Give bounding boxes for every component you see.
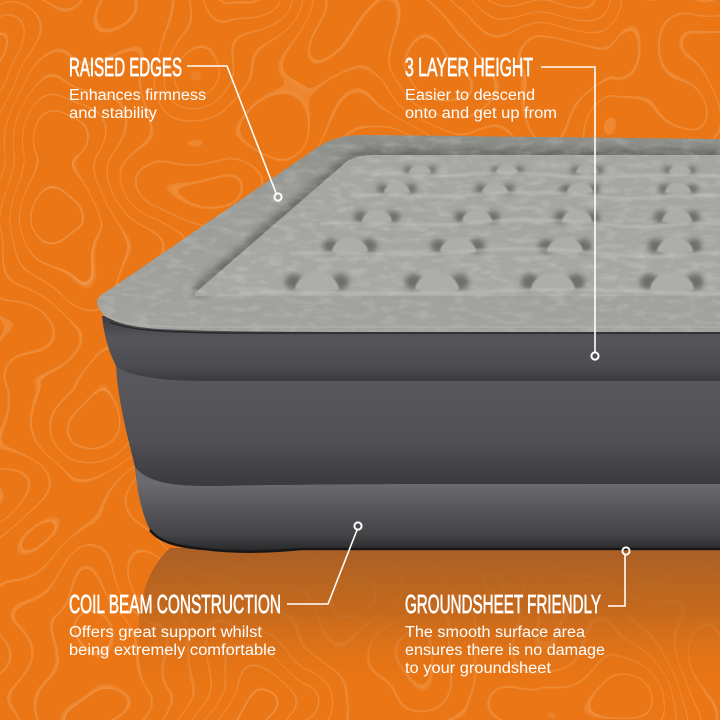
heading: 3 LAYER HEIGHT (405, 52, 533, 82)
body underlay (102, 316, 720, 552)
groundsheet edge (150, 530, 720, 552)
description: ensures there is no damage (405, 642, 605, 659)
leader line (187, 66, 282, 201)
leader line (541, 67, 599, 360)
callout: groundsheet friendly (405, 547, 630, 677)
leader line (608, 547, 630, 606)
description (69, 87, 206, 122)
heading: COIL BEAM CONSTRUCTION (69, 589, 281, 619)
description: and stability (69, 105, 157, 122)
description: The smooth surface area (405, 624, 585, 641)
description: being extremely comfortable (69, 642, 276, 659)
mattress flocked top (97, 135, 720, 332)
panel dark texture (195, 155, 720, 296)
callout: raised edges (69, 52, 282, 201)
description: Easier to descend (405, 87, 535, 104)
tuft domes (295, 165, 694, 290)
quilted sleeping panel (195, 155, 720, 296)
air bed (97, 135, 720, 552)
description: Offers great support whilst (69, 624, 263, 641)
description (69, 624, 276, 659)
bolster shading along the crease (195, 155, 720, 293)
description (405, 624, 605, 677)
layer: middle chamber (116, 366, 720, 486)
layer: bottom chamber (135, 467, 720, 552)
heading: RAISED EDGES (69, 52, 182, 82)
top seam (104, 315, 720, 327)
tuft shadows (285, 166, 704, 290)
panel surface (195, 155, 720, 296)
description (405, 87, 557, 122)
description: Enhances firmness (69, 87, 206, 104)
mattress reflection on the floor (138, 548, 720, 700)
layer: top chamber (102, 316, 720, 381)
callout: coil beam construction (69, 522, 362, 659)
callout: 3 layer height (405, 52, 599, 360)
panel light texture (195, 155, 720, 296)
leader line (287, 522, 362, 604)
description: to your groundsheet (405, 660, 552, 677)
flocked top dark texture (97, 135, 720, 332)
description: onto and get up from (405, 105, 557, 122)
wrinkle highlights (240, 173, 720, 294)
flocked top light texture (97, 135, 720, 332)
